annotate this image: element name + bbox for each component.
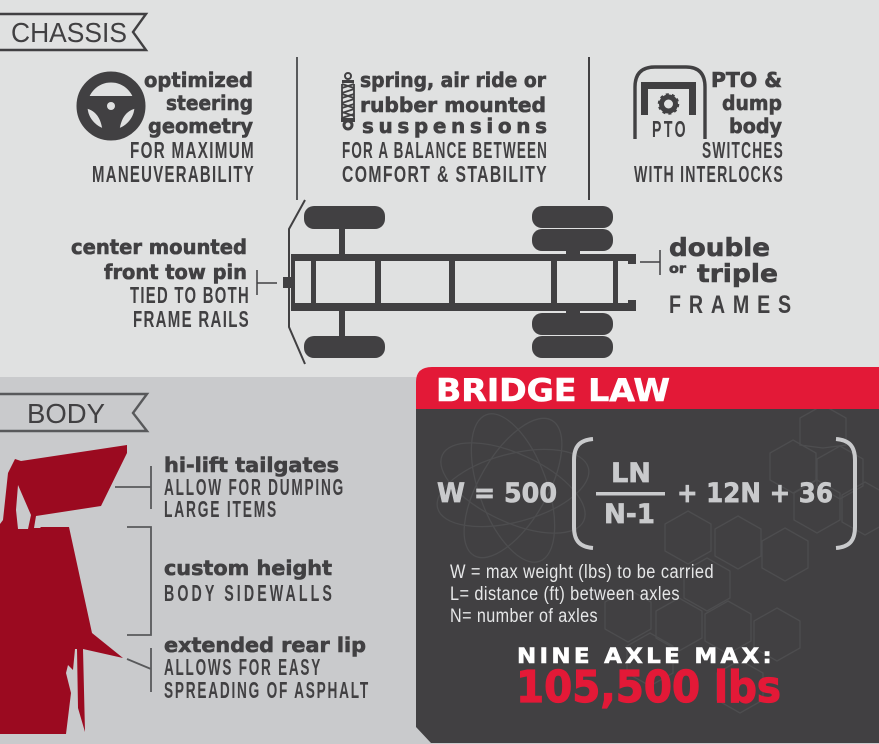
text: rear lip: SPREADING OF ASPHALT xyxy=(164,677,370,703)
icon: steering wheel xyxy=(82,77,140,135)
formula xyxy=(437,439,855,548)
text: steering geometry: steering xyxy=(166,91,253,115)
text: PTO switches: body xyxy=(729,114,782,138)
text: PTO switches: WITH INTERLOCKS xyxy=(634,161,784,187)
text: custom height xyxy=(164,556,335,606)
text: tailgates: hi-lift tailgates xyxy=(164,453,339,477)
text: PTO switches: PTO & xyxy=(711,68,782,92)
icon: suspension spring xyxy=(341,73,355,129)
heading: bridge law banner xyxy=(416,367,879,409)
text: PTO switches xyxy=(634,68,784,187)
text: rear lip: ALLOWS FOR EASY xyxy=(164,654,322,680)
text: custom height: BODY SIDEWALLS xyxy=(164,580,335,606)
text: tailgates: ALLOW FOR DUMPING xyxy=(164,474,345,500)
heading: body banner: BODY xyxy=(27,398,105,429)
heading: chassis banner: CHASSIS xyxy=(11,17,127,48)
callout: nine axle max: NINE AXLE MAX: xyxy=(517,644,775,668)
text: tow pin: TIED TO BOTH xyxy=(130,282,250,308)
text: PTO switches: SWITCHES xyxy=(702,137,784,163)
text: rear lip xyxy=(164,633,370,703)
icon: PTO xyxy=(635,67,705,142)
panel: body xyxy=(0,394,370,734)
text: rear lip: extended rear lip xyxy=(164,633,366,657)
panel: chassis xyxy=(0,14,799,364)
text: tow pin: center mounted xyxy=(71,235,247,259)
panel: bridge law xyxy=(416,367,879,743)
text: tailgates: LARGE ITEMS xyxy=(164,496,278,522)
panel background xyxy=(416,405,879,743)
text: steering geometry: optimized xyxy=(144,68,253,92)
text: steering geometry: geometry xyxy=(148,114,253,138)
text: tow pin: FRAME RAILS xyxy=(133,306,250,332)
formula: N-1 xyxy=(604,499,655,530)
text: suspensions: spring, air ride or xyxy=(360,68,546,92)
text: tailgates xyxy=(164,453,345,522)
text: suspensions xyxy=(342,68,548,187)
text: steering geometry: MANEUVERABILITY xyxy=(92,161,255,187)
text: steering geometry: FOR MAXIMUM xyxy=(130,137,255,163)
text: suspensions: COMFORT & STABILITY xyxy=(342,161,548,187)
text: steering geometry xyxy=(92,68,255,187)
text: custom height: custom height xyxy=(164,556,332,580)
text: frames: FRAMES xyxy=(669,291,799,319)
text: tow pin: front tow pin xyxy=(104,260,247,284)
formula: W = 500 xyxy=(437,478,557,509)
chart: truck frame diagram xyxy=(283,200,636,364)
callout: nine axle max xyxy=(516,644,781,713)
legend: N= number of axles xyxy=(450,606,598,627)
formula: LN xyxy=(611,458,651,489)
legend xyxy=(450,562,714,627)
text: frames: or xyxy=(669,262,687,277)
text: frames: triple xyxy=(697,259,778,288)
text: frames: double xyxy=(669,233,770,262)
legend: W = max weight (lbs) to be carried xyxy=(450,562,714,583)
text: tow pin xyxy=(71,235,250,332)
text: suspensions: FOR A BALANCE BETWEEN xyxy=(342,137,548,163)
text: frames xyxy=(669,233,799,319)
text: suspensions: suspensions xyxy=(362,114,547,138)
text: suspensions: rubber mounted xyxy=(360,93,546,117)
legend: L= distance (ft) between axles xyxy=(450,584,680,605)
illustration: dump truck body xyxy=(0,445,127,734)
icon: PTO: PTO xyxy=(652,116,688,142)
formula: + 12N + 36 xyxy=(677,478,833,509)
heading: bridge law banner: BRIDGE LAW xyxy=(436,373,670,409)
heading: body banner xyxy=(0,394,147,431)
callout: nine axle max: 105,500 lbs xyxy=(516,662,781,713)
text: PTO switches: dump xyxy=(722,91,782,115)
